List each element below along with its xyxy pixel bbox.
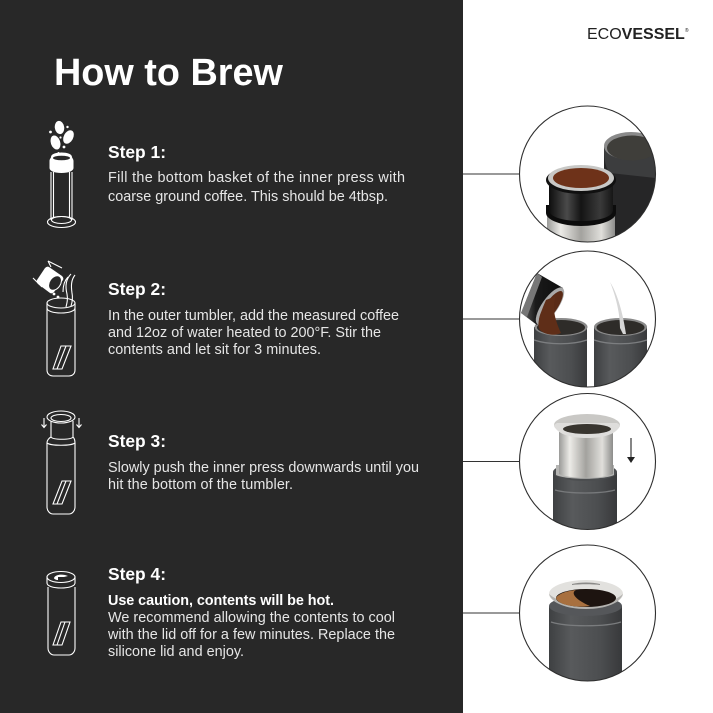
text: step 2: [108, 279, 399, 358]
text: step 4: with the lid off for a few minutes. Replace the: [107, 627, 395, 643]
text: step 4: Use caution, contents will be hot.: [108, 593, 334, 609]
icon: pushing inner press down: [42, 411, 82, 514]
text: step 2: and 12oz of water heated to 200°F. Stir the: [108, 325, 381, 341]
photo circle: pressing down: [463, 394, 656, 532]
photo circle: adding coffee and water: [463, 251, 656, 389]
logo: Ecovessel: ECOVESSEL: [587, 26, 685, 43]
text: step 4: Step 4:: [108, 564, 166, 584]
text: step 2: In the outer tumbler, add the measured coffee: [108, 308, 399, 324]
photo circle: finished coffee: [463, 545, 656, 684]
text: step 4: [107, 564, 395, 660]
text: step 2: contents and let sit for 3 minutes.: [108, 342, 321, 358]
text: step 1: Fill the bottom basket of the inner press with: [108, 170, 405, 186]
text: step 2: Step 2:: [108, 279, 166, 299]
text: step 3: Slowly push the inner press downwards until you: [108, 460, 419, 476]
photo circle: coffee in basket: [463, 106, 658, 244]
text: step 3: [108, 431, 419, 493]
icon: coffee beans over inner press: [48, 120, 76, 228]
text: step 1: coarse ground coffee. This should be 4tbsp.: [108, 189, 388, 205]
text: step 1: Step 1:: [108, 142, 166, 162]
text: step 1: [108, 142, 405, 205]
text: step 4: silicone lid and enjoy.: [108, 644, 244, 660]
icon: tumbler with lid: [47, 572, 75, 655]
text: step 3: Step 3:: [108, 431, 166, 451]
icon: pouring coffee and water into tumbler: [33, 261, 75, 376]
panel: dark instructions background: [0, 0, 463, 713]
text: step 4: We recommend allowing the contents to cool: [108, 610, 395, 626]
logo: Ecovessel: ®: [685, 27, 689, 34]
title: How to Brew: [54, 52, 283, 94]
text: step 3: hit the bottom of the tumbler.: [108, 477, 293, 493]
